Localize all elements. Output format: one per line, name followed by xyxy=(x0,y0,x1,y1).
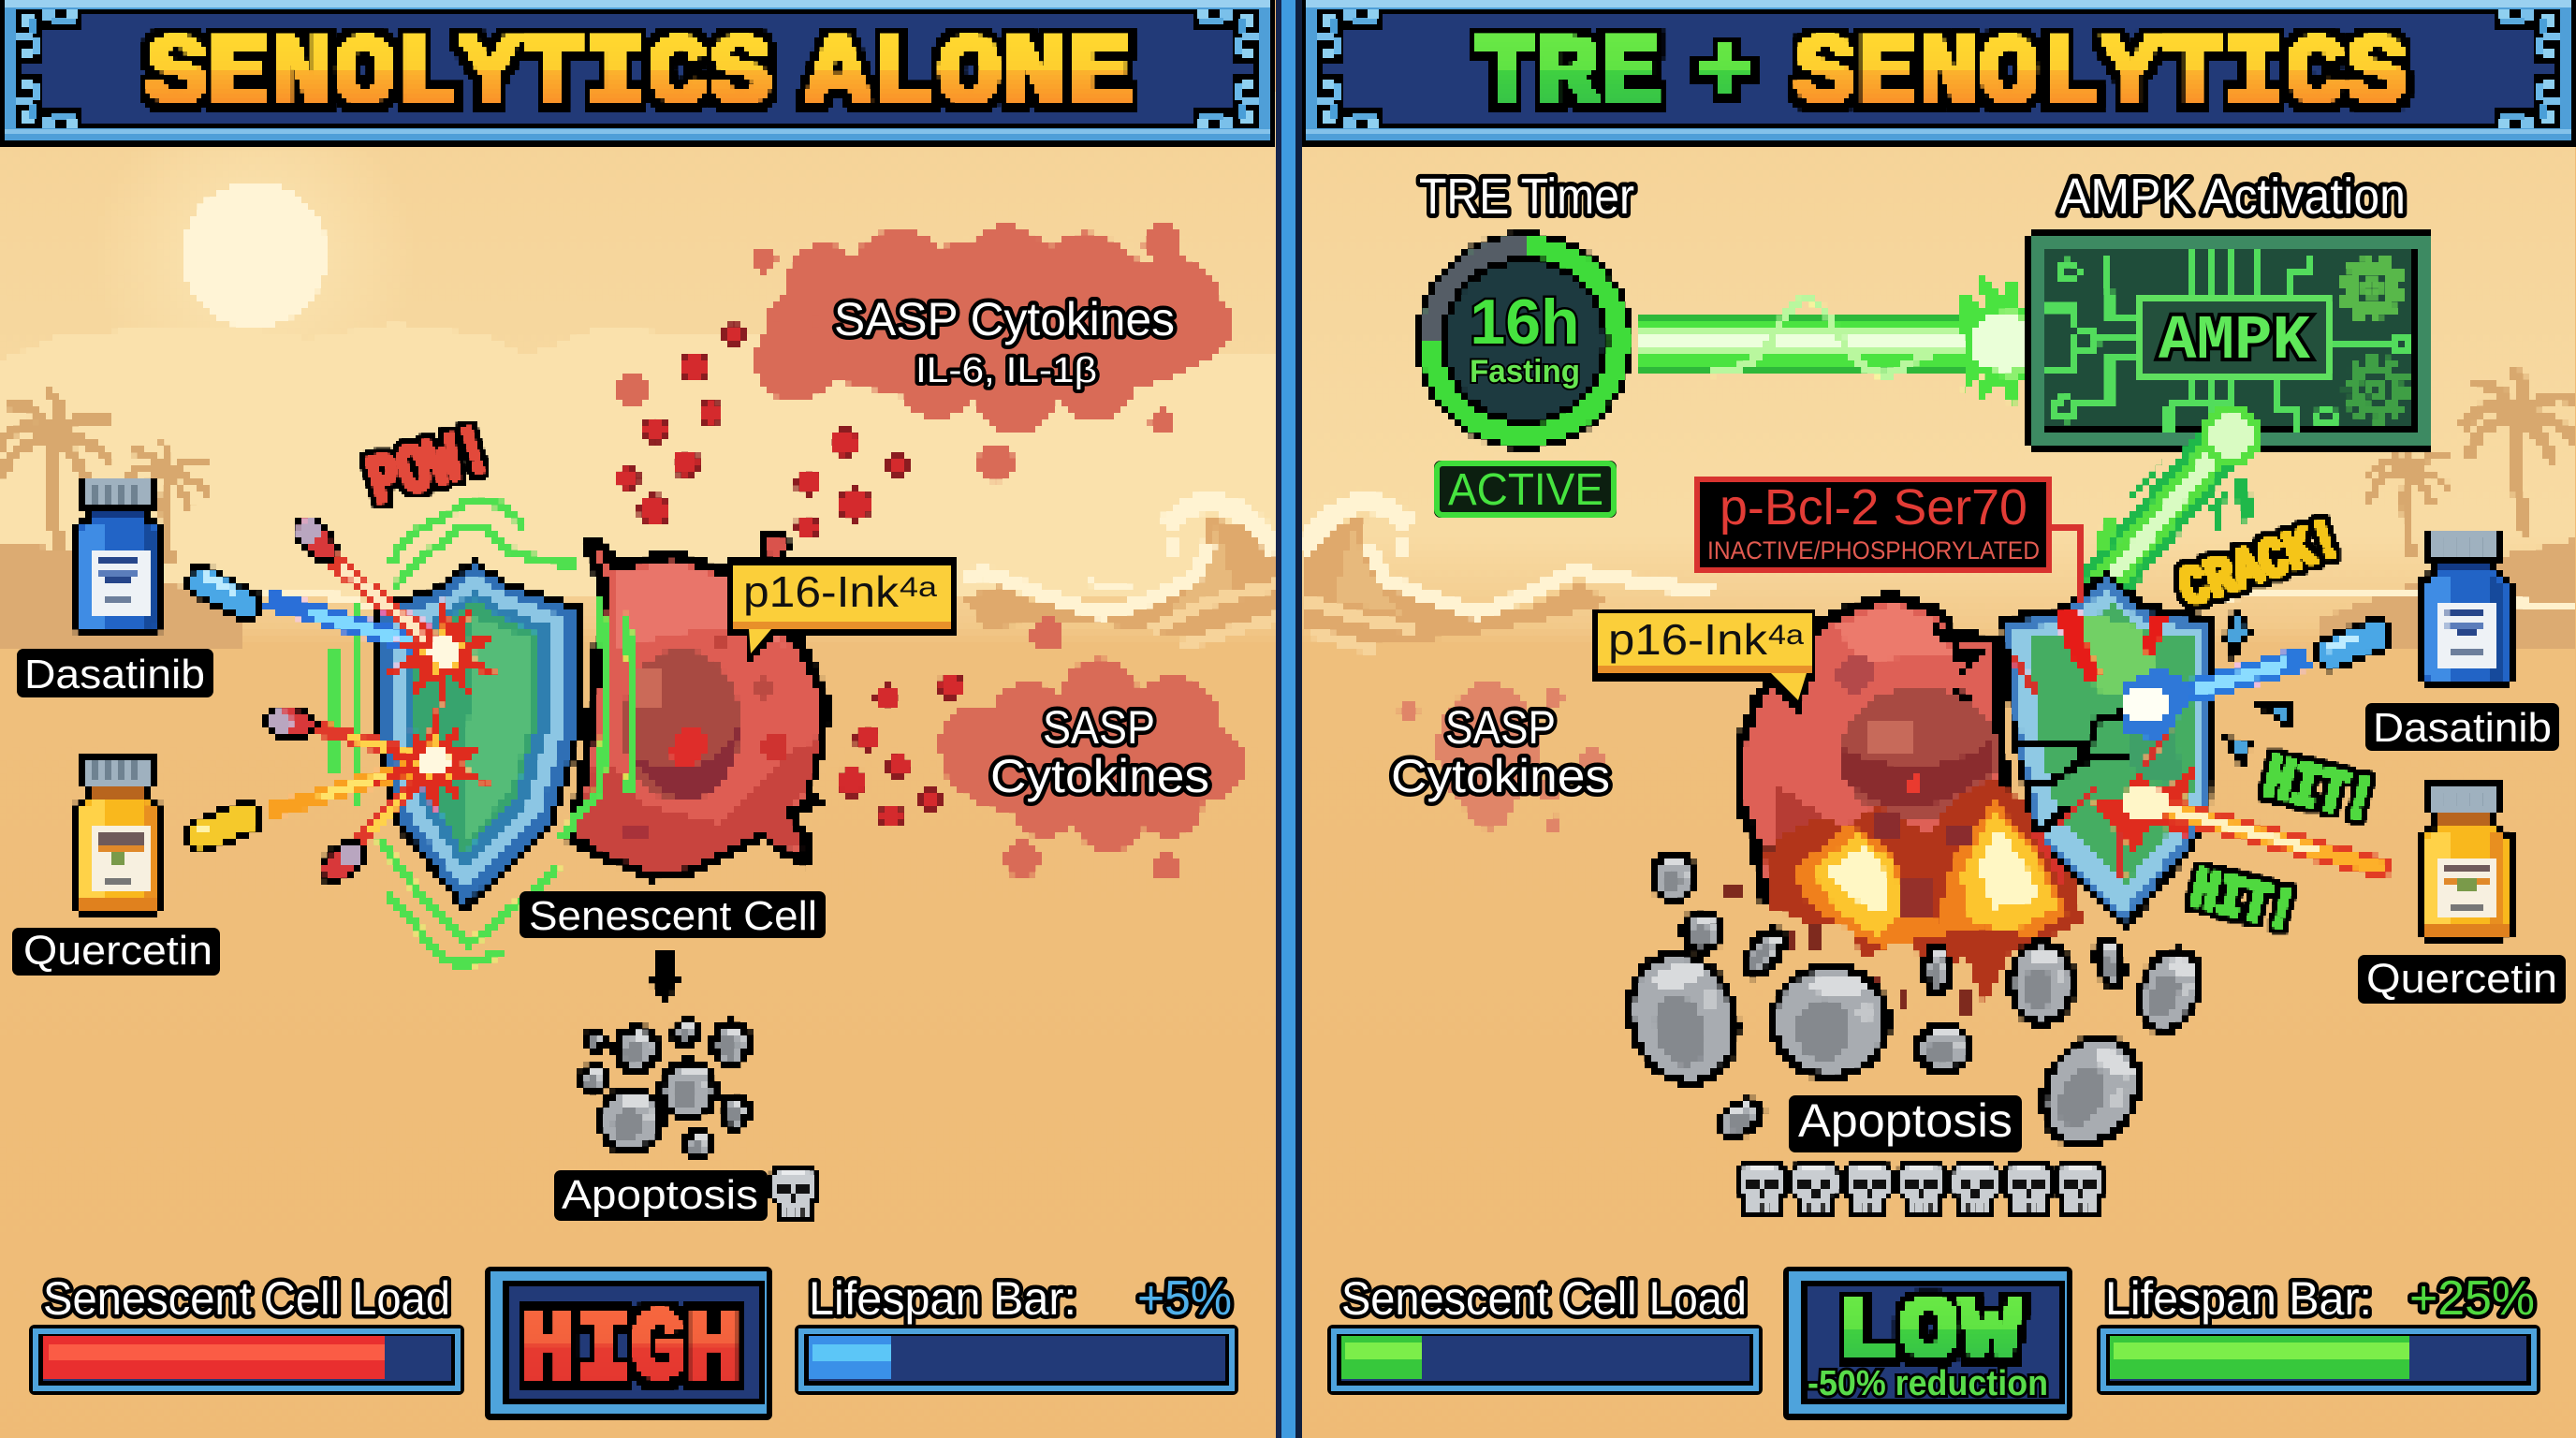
text: SASP cytokines upper: IL-6, IL-1β xyxy=(915,351,1097,390)
stat: HIGH badge xyxy=(485,1267,772,1420)
timer text: 16h xyxy=(1470,286,1580,358)
cytokine particles xyxy=(616,325,963,828)
wave and shoreline xyxy=(1302,503,2576,651)
arrow: to apoptosis xyxy=(645,948,684,1003)
stat: LOW badge: LOW xyxy=(1837,1284,2023,1382)
callout tail: p16-Ink4a xyxy=(727,560,957,663)
AMPK activation panel xyxy=(2027,231,2434,449)
icon: Quercetin bottle xyxy=(70,755,166,916)
chip xyxy=(2138,297,2327,378)
shield shards xyxy=(2226,609,2289,766)
apoptotic debris xyxy=(581,1021,749,1157)
text: SASP cytokines upper: SASP Cytokines xyxy=(834,293,1175,345)
label: p-Bcl-2 Ser70: p-Bcl-2 Ser70 xyxy=(1720,479,2027,536)
icon: blue pill xyxy=(2308,611,2398,677)
stat: HIGH badge: HIGH xyxy=(520,1294,741,1408)
impact star 2 xyxy=(369,703,492,819)
text: SASP cytokines lower xyxy=(990,701,1209,802)
shield xyxy=(373,558,580,914)
chip label: AMPK: AMPK xyxy=(2159,306,2311,377)
drug beams and impacts xyxy=(267,552,444,857)
title: SENOLYTICS xyxy=(145,21,772,131)
callout: p16-Ink4a: p16-Ink xyxy=(1608,615,1768,664)
cloud: faded SASP xyxy=(1398,682,1603,832)
illustration: TRE plus senolytics scene xyxy=(1295,94,2576,1438)
stat: senescent cell load xyxy=(29,1272,464,1395)
text: AMPK Activation: AMPK Activation xyxy=(2059,169,2406,225)
title xyxy=(1474,21,2408,131)
title: + xyxy=(1695,21,1755,131)
callout tail: p16-Ink4a xyxy=(1592,608,1818,713)
title: SENOLYTICS xyxy=(1794,21,2408,131)
timer: 16h fasting ring xyxy=(1415,231,1634,450)
callout: p16-Ink4a: 4a xyxy=(1768,620,1804,651)
label: Senescent Cell: Senescent Cell xyxy=(529,893,817,939)
energy shield aura xyxy=(335,499,633,963)
label: Dasatinib: Dasatinib xyxy=(2373,705,2552,751)
gear top xyxy=(2344,260,2400,316)
icon: Dasatinib bottle xyxy=(70,477,166,638)
palm trees xyxy=(0,395,243,646)
desert dune band xyxy=(0,323,1277,599)
icon: Dasatinib bottle xyxy=(2418,529,2513,690)
icon: Quercetin bottle xyxy=(2418,783,2513,944)
callout: p16-Ink4a: p16-Ink xyxy=(743,567,900,616)
stat: LOW badge xyxy=(1783,1267,2072,1420)
stat: senescent cell load: Senescent Cell Load xyxy=(1341,1272,1747,1325)
sound effect: HIT 1: HIT! xyxy=(2257,744,2381,839)
impact: blue beam xyxy=(2121,657,2308,740)
panel: TRE plus senolytics xyxy=(1295,0,2576,1438)
icon: skull xyxy=(768,1164,821,1224)
cytokine blobs xyxy=(616,224,1182,880)
panel: senolytics alone xyxy=(0,0,1281,1438)
text: faded SASP cytokines: Cytokines xyxy=(1391,750,1610,802)
stat: senescent cell load: Senescent Cell Load xyxy=(43,1272,450,1325)
stat: lifespan bar: +5% xyxy=(1137,1271,1232,1326)
stat: LOW badge: -50% reduction xyxy=(1808,1364,2048,1403)
label: Quercetin: Quercetin xyxy=(23,928,212,974)
beam: TRE to AMPK xyxy=(1637,267,2039,412)
impact: yellow beam xyxy=(2089,763,2390,871)
skull row xyxy=(1735,1159,2107,1219)
badge: ACTIVE: ACTIVE xyxy=(1448,465,1603,515)
connector: phosphorylation link xyxy=(2050,530,2081,603)
stat: lifespan bar xyxy=(795,1271,1238,1395)
text: faded SASP cytokines xyxy=(1391,701,1610,802)
header: senolytics alone xyxy=(0,0,1275,147)
rocks xyxy=(1614,854,2210,1163)
stat: lifespan bar xyxy=(2097,1271,2540,1395)
gear bottom xyxy=(2349,361,2405,418)
label: Dasatinib: Dasatinib xyxy=(24,652,205,697)
impact star 1 xyxy=(378,594,502,710)
text: SASP cytokines lower: SASP xyxy=(1043,701,1155,754)
timer text: Fasting xyxy=(1470,354,1580,389)
palm trees xyxy=(2321,374,2576,646)
label: Quercetin: Quercetin xyxy=(2366,956,2557,1002)
text: SASP cytokines lower: Cytokines xyxy=(990,750,1209,802)
cloud: SASP lower xyxy=(939,658,1245,852)
text: TRE Timer: TRE Timer xyxy=(1419,169,1634,225)
circuit traces xyxy=(2046,251,2409,431)
panel divider xyxy=(1276,0,1302,1438)
label: p-Bcl-2 Ser70: INACTIVE/PHOSPHORYLATED xyxy=(1707,536,2040,565)
text: faded SASP cytokines: SASP xyxy=(1445,701,1556,754)
wave and shoreline xyxy=(243,503,1277,646)
label: Apoptosis: Apoptosis xyxy=(562,1172,758,1218)
stat: lifespan bar: +25% xyxy=(2409,1271,2535,1326)
callout: p16-Ink4a xyxy=(733,565,951,653)
red drug pins xyxy=(261,506,375,893)
timer text xyxy=(1470,286,1580,389)
stat: lifespan bar: Lifespan Bar: xyxy=(2105,1272,2372,1325)
text: SASP cytokines upper xyxy=(834,293,1175,390)
label: Apoptosis: Apoptosis xyxy=(1798,1094,2012,1147)
sound effect: CRACK: CRACK! xyxy=(2172,509,2349,624)
senescent cell xyxy=(571,532,827,876)
title xyxy=(145,21,1134,131)
stat: lifespan bar: Lifespan Bar: xyxy=(809,1272,1076,1325)
callout: p16-Ink4a: 4a xyxy=(900,572,937,603)
label: p-Bcl-2 Ser70 xyxy=(1694,477,2052,573)
callout: p16-Ink4a xyxy=(1598,613,1812,700)
icon: yellow pill xyxy=(179,794,269,859)
header: TRE plus senolytics xyxy=(1301,0,2576,147)
stat: senescent cell load xyxy=(1327,1272,1763,1395)
sound effect: POW: POW! xyxy=(359,413,501,524)
cloud: SASP upper xyxy=(754,225,1234,433)
cracked shield xyxy=(2000,569,2215,933)
illustration: senolytics alone scene xyxy=(0,94,1281,1438)
cracked senescent cell xyxy=(1740,596,2009,917)
title: TRE xyxy=(1474,21,1661,131)
title: ALONE xyxy=(805,21,1134,131)
explosions xyxy=(1722,777,2083,1013)
sound effect: HIT 2: HIT! xyxy=(2184,858,2302,947)
icon: sun xyxy=(95,95,414,414)
icon: blue pill xyxy=(179,558,269,627)
beam: AMPK to shield xyxy=(2097,410,2258,585)
